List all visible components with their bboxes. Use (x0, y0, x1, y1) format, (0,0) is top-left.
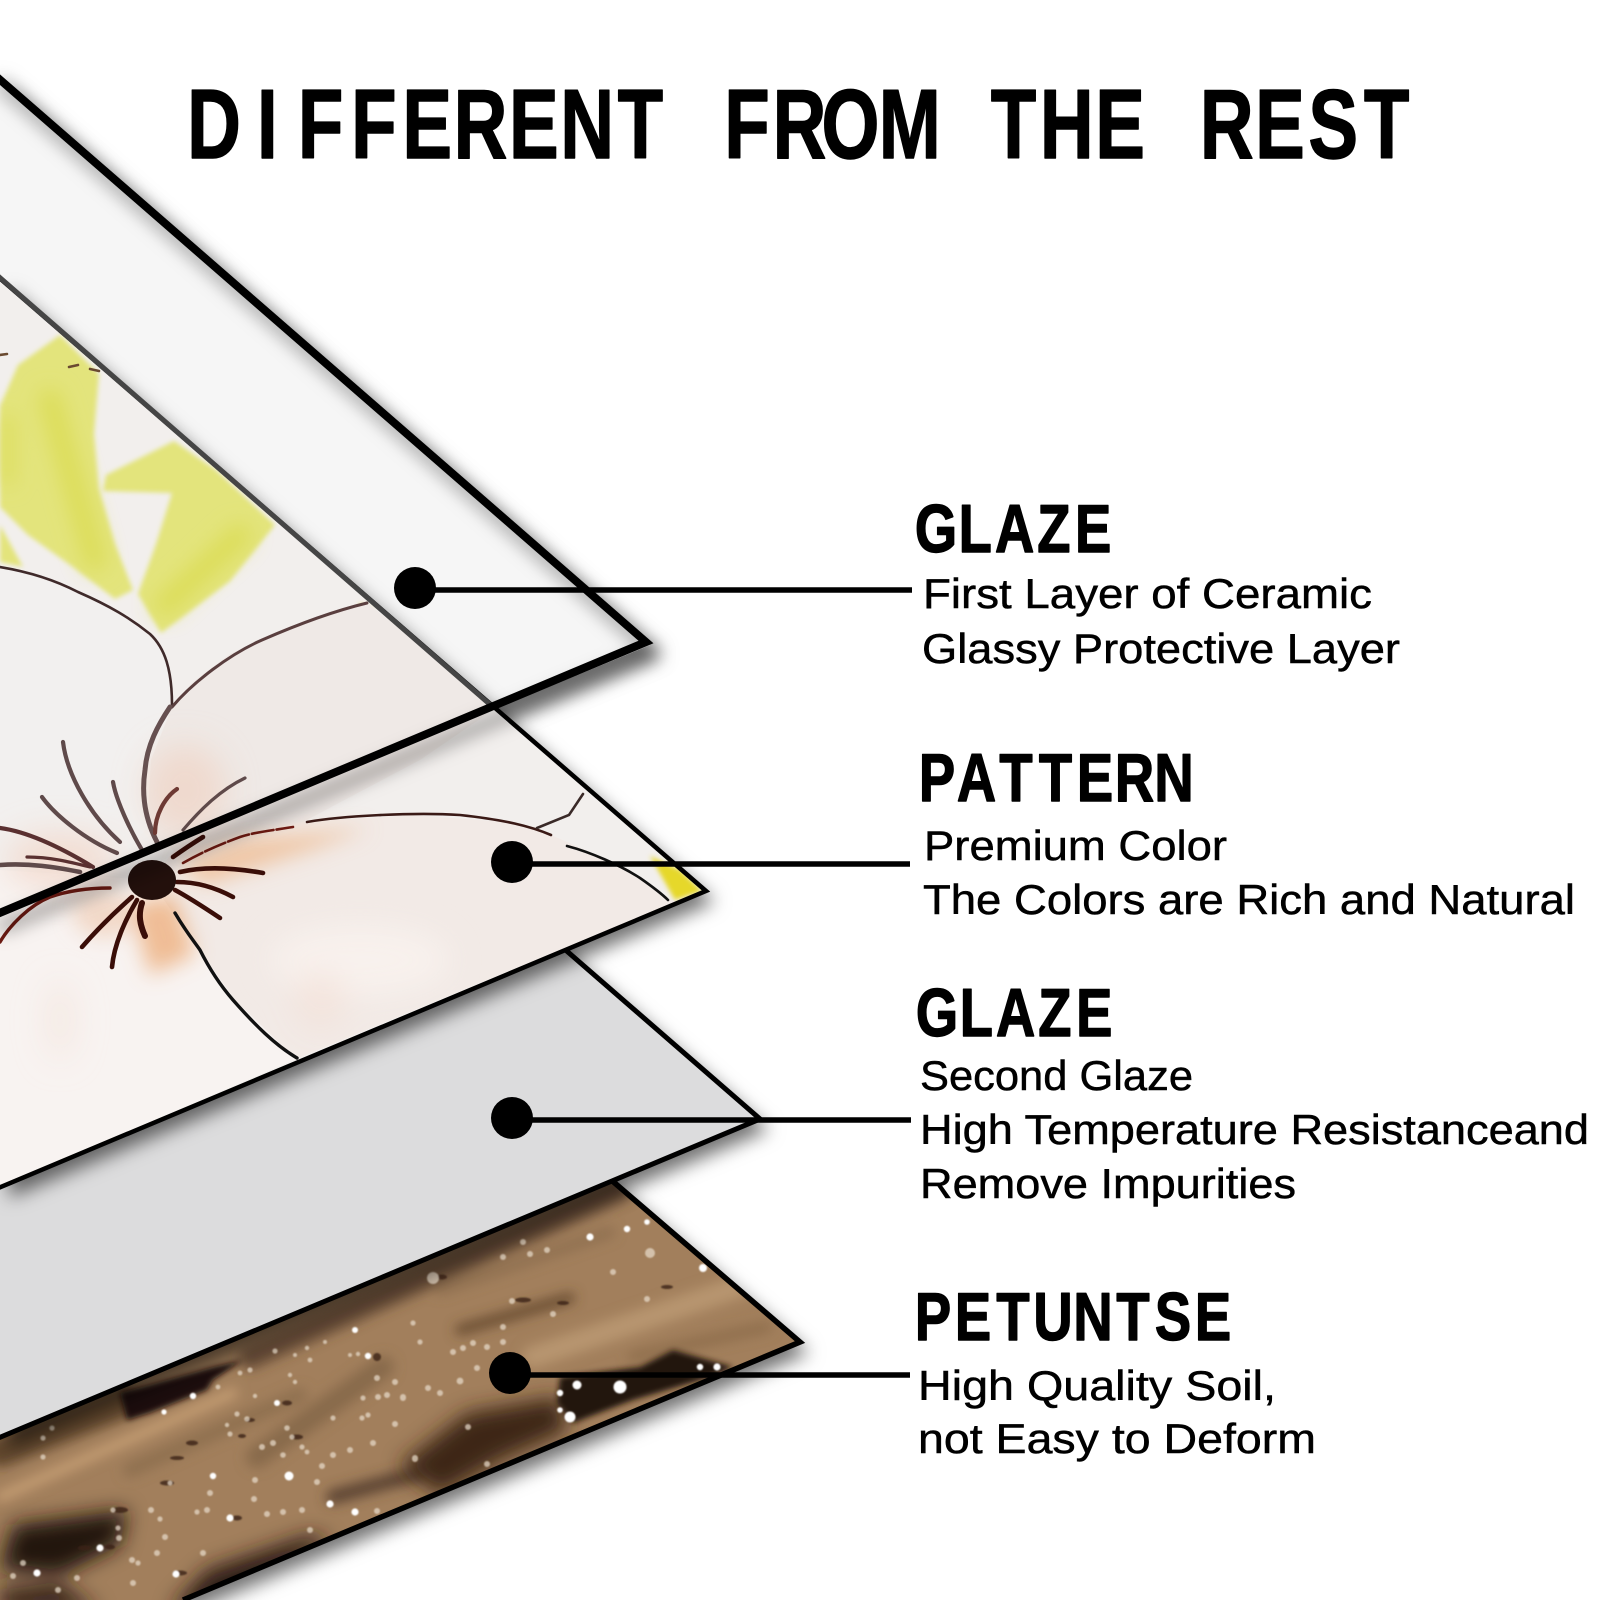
leader line (510, 1372, 910, 1378)
callout: pattern (491, 740, 1575, 923)
heading: second glaze: GLAZE (916, 975, 1112, 1051)
callout: second glaze (491, 975, 1589, 1207)
callout: petuntse (489, 1279, 1316, 1462)
petal outlines (0, 354, 668, 1058)
petal fills (0, 567, 172, 872)
dark soil shapes (120, 1350, 733, 1423)
heading: petuntse: PETUNTSE (915, 1279, 1231, 1355)
lower stamens (0, 837, 263, 967)
flower centre (128, 860, 176, 900)
description: petuntse: not Easy to Deform (918, 1415, 1316, 1462)
description: petuntse: High Quality Soil, (918, 1362, 1276, 1409)
marker dot (489, 1352, 531, 1394)
upper stamens (0, 742, 245, 872)
layer: first glaze fill (0, 80, 650, 913)
heading: pattern: PATTERN (919, 740, 1194, 816)
dark pits (78, 1274, 673, 1576)
marker dot (491, 1097, 533, 1139)
description: glaze: Glassy Protective Layer (922, 625, 1400, 672)
layer: petuntse soil (0, 1136, 800, 1600)
leader line (415, 587, 912, 593)
layer: first glaze outline (0, 71, 646, 917)
leader line (512, 861, 910, 867)
description: second glaze: Second Glaze (920, 1052, 1193, 1099)
description: glaze: First Layer of Ceramic (923, 570, 1372, 617)
description: pattern: Premium Color (924, 822, 1227, 869)
description: pattern: The Colors are Rich and Natural (923, 876, 1575, 923)
leader line (512, 1117, 911, 1123)
petal colour washes (2, 740, 230, 1034)
soft dark soil masses (0, 1397, 567, 1600)
marker dot (491, 841, 533, 883)
soil tone bands (0, 1190, 767, 1497)
soil outline (183, 1136, 800, 1600)
heading: glaze: GLAZE (915, 491, 1111, 567)
layer: flower pattern (0, 275, 706, 1189)
pattern outline (0, 275, 706, 1189)
droplets (10, 1239, 655, 1593)
yellow leaves (0, 335, 702, 900)
marker dot (394, 567, 436, 609)
layer: second glaze (0, 893, 760, 1439)
bright sparkles (33, 1219, 721, 1578)
leaf shading (8, 400, 240, 605)
description: second glaze: High Temperature Resistanceand (920, 1106, 1589, 1153)
description: second glaze: Remove Impurities (920, 1160, 1296, 1207)
callout: glaze (394, 491, 1400, 672)
title: DIFFERENT FROM THE REST (187, 70, 1409, 179)
